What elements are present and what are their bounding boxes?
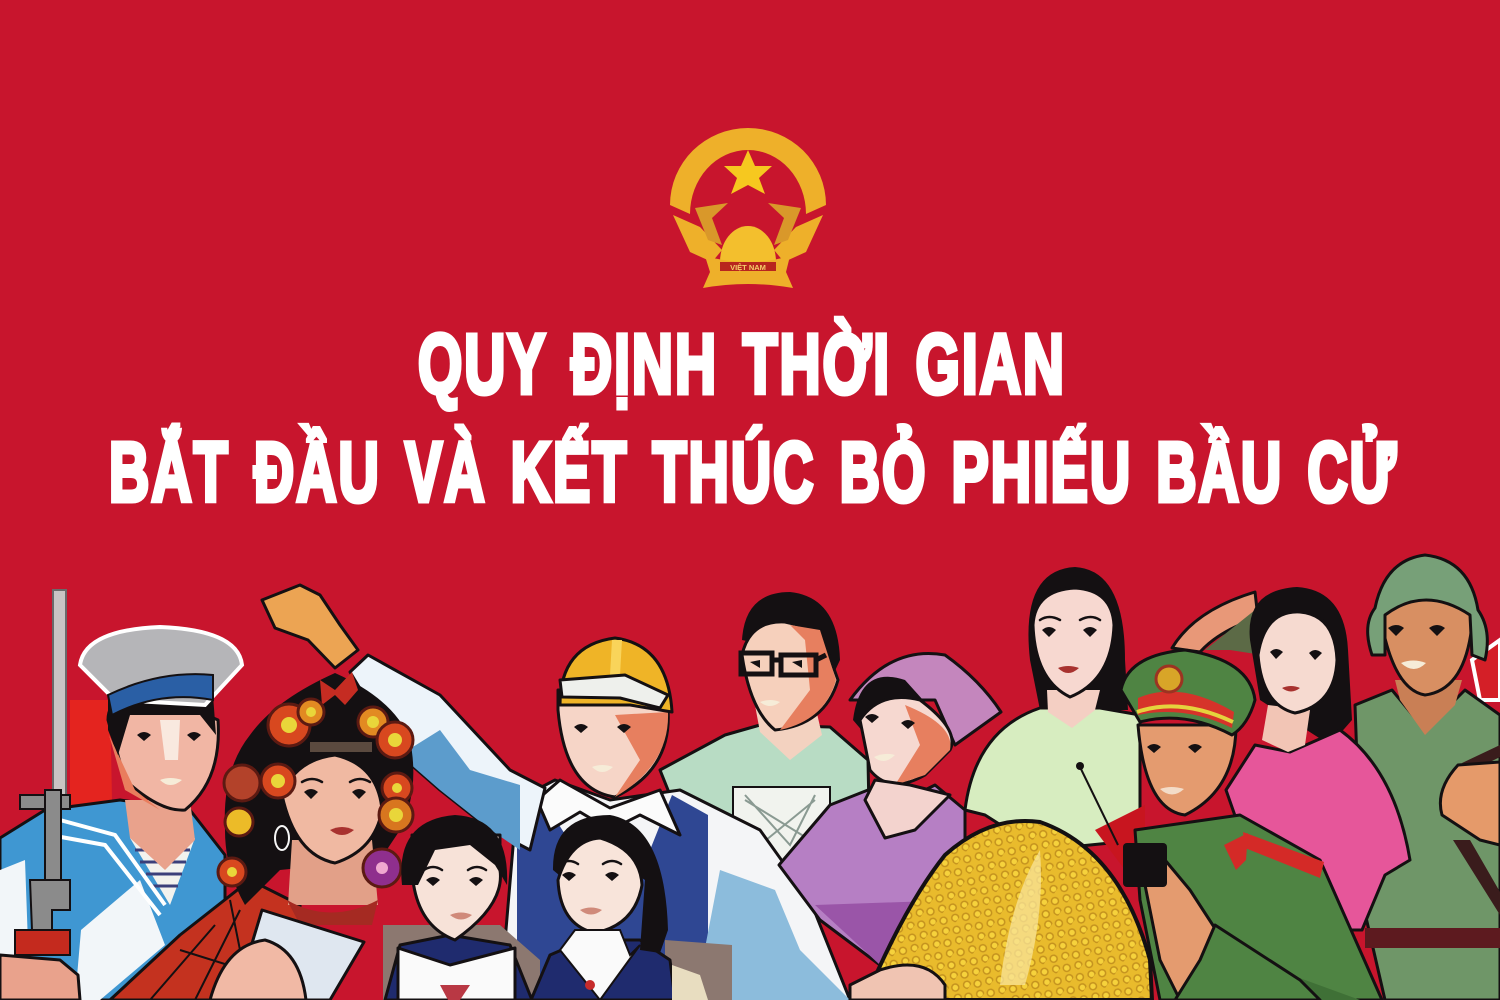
face [282, 755, 382, 863]
paper [250, 910, 364, 1000]
miner body [500, 780, 850, 1000]
raised arm [1172, 592, 1258, 652]
headdress hair [225, 673, 413, 905]
figure: boy [385, 815, 532, 1000]
red patterned garment [110, 880, 300, 1000]
emblem wreath arc [670, 128, 826, 214]
striped shirt [130, 838, 195, 905]
police arm and hand [1145, 860, 1216, 1000]
soldier strap and hand [1453, 745, 1500, 915]
sailor body [0, 800, 225, 1000]
sailor hand [0, 955, 80, 1000]
figure: woman in pink [1172, 587, 1410, 930]
police epaulette [1243, 832, 1324, 878]
bench behind children [383, 925, 732, 1000]
rice mound [865, 821, 1152, 1000]
hand on rice [850, 965, 945, 1000]
title line 1: QUY ĐỊNH THỜI GIAN [418, 317, 1066, 411]
soldier neck [1395, 680, 1462, 735]
emblem cog [720, 226, 776, 262]
miner goggles [560, 675, 668, 708]
figure: miner with raised arm [262, 585, 850, 1000]
figure: police officer [1076, 650, 1382, 1000]
emblem ribbon [703, 256, 793, 288]
miner helmet [560, 638, 672, 712]
document with logo [733, 787, 830, 860]
hand [210, 940, 306, 1000]
neck [288, 840, 378, 905]
emblem wheat left [673, 215, 722, 262]
fist [262, 585, 358, 668]
glasses [741, 653, 826, 675]
rifle [15, 590, 70, 955]
sailor cap [80, 627, 242, 705]
emblem star [724, 150, 772, 194]
national emblem [670, 128, 826, 288]
figure: girl [531, 815, 708, 1000]
figure: woman with purple scarf [779, 653, 1001, 965]
sailor face [108, 694, 218, 810]
figure: man with glasses [660, 592, 870, 860]
soldier belt [1365, 928, 1500, 948]
figure: sailor with rifle [0, 590, 242, 1000]
flowers [218, 699, 413, 887]
raised arm sleeve [350, 655, 545, 850]
figure: woman in pale green ao dai [965, 567, 1140, 850]
microphone [1076, 762, 1118, 845]
bow [320, 672, 358, 705]
title [109, 317, 1398, 519]
headband [310, 742, 372, 752]
figure: soldier [1355, 555, 1500, 1000]
national emblem: VIỆT NAM [730, 263, 766, 272]
neck [125, 800, 195, 870]
emblem wheat right [774, 215, 823, 262]
figure: woman with flower headdress [110, 672, 413, 1000]
police cap [1121, 650, 1255, 735]
sailor hair [108, 695, 216, 755]
